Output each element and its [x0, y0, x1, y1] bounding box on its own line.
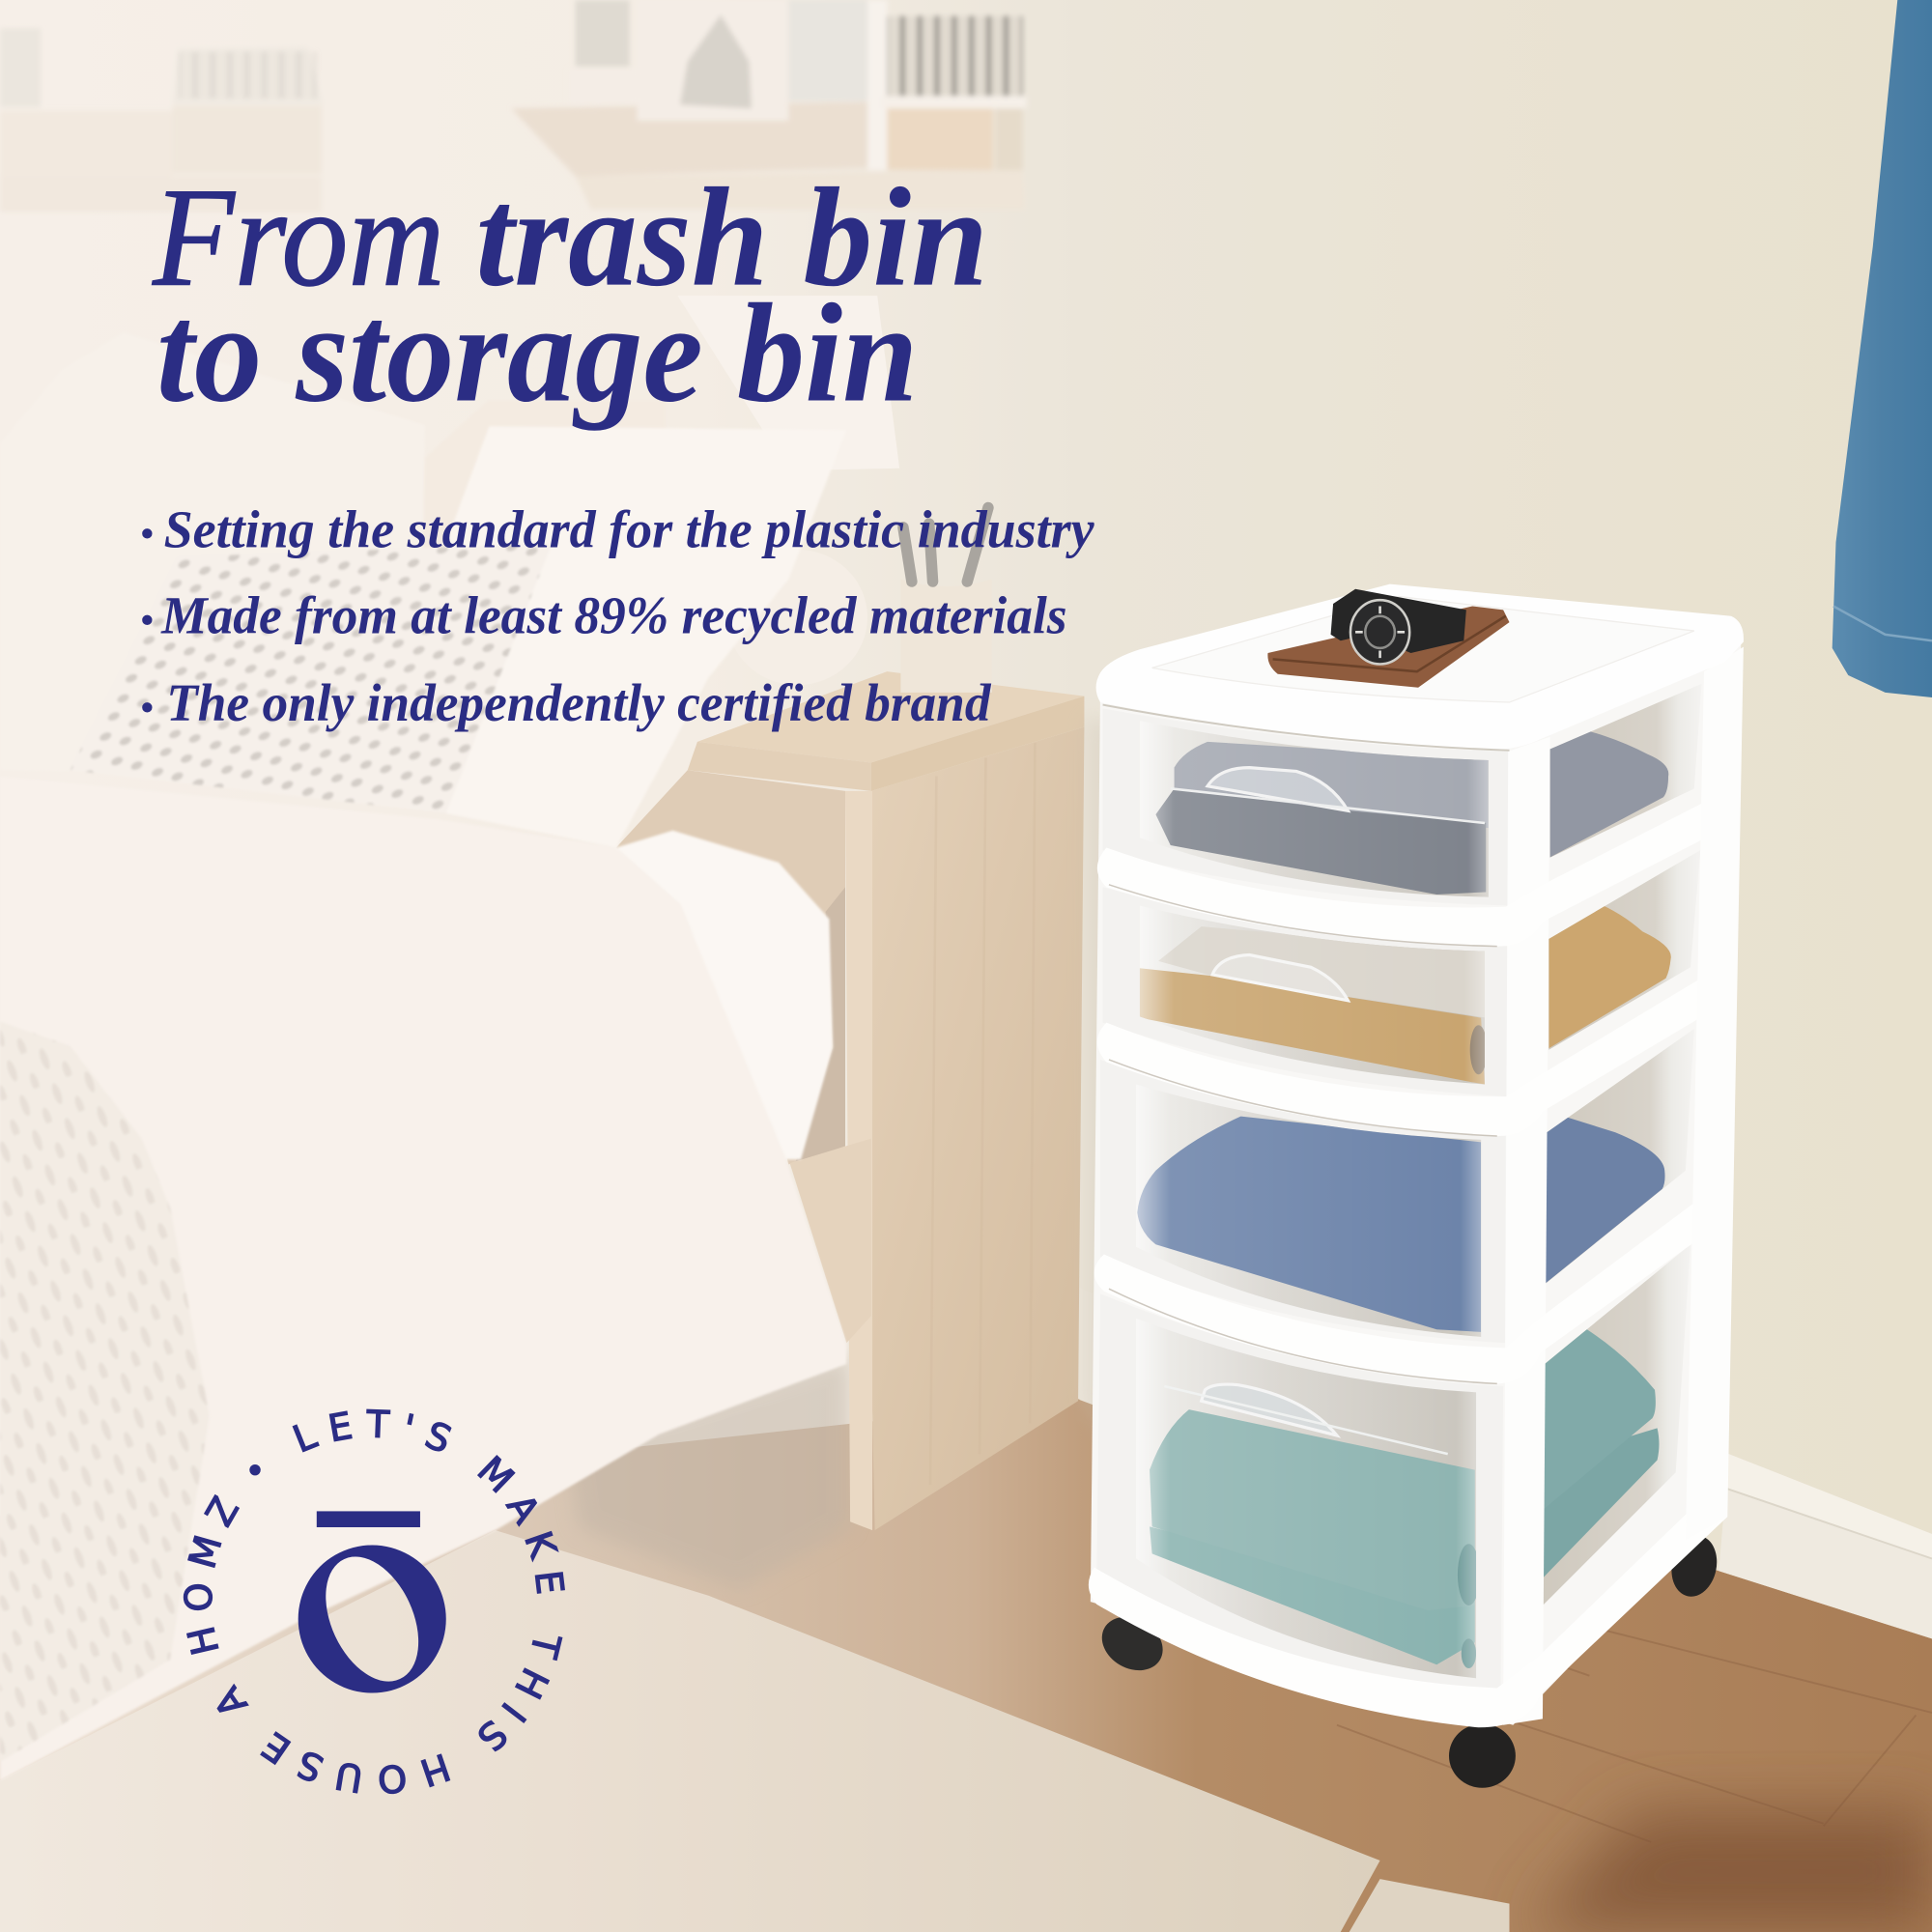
- floor: [0, 1355, 1932, 1932]
- jeans hanging on the wall: [1833, 0, 1932, 697]
- wall shelves: [0, 0, 1026, 212]
- title: trash bin: [475, 158, 988, 316]
- side window 2 with ochre towel: [1548, 856, 1690, 1049]
- bullet: plastic industry standard: Setting the standard for the plastic industry: [164, 499, 1094, 558]
- title: From: [152, 158, 444, 316]
- casters: [1093, 1531, 1722, 1788]
- bullet list: [140, 499, 1094, 732]
- logo bar: [317, 1511, 420, 1527]
- side window 3 with blue towel: [1546, 1036, 1685, 1283]
- wristwatch: [1331, 589, 1466, 665]
- bullet: certified brand: •: [140, 688, 154, 728]
- lamp, vase and pen cup: [678, 296, 992, 693]
- cabinet body: [1091, 640, 1741, 1725]
- rear corner post: [1686, 647, 1744, 1540]
- side window 4 with teal towels: [1544, 1253, 1681, 1605]
- drawer 2 with ochre towel: [1140, 911, 1485, 1084]
- circular logo badge: [184, 1408, 565, 1795]
- bed with pillows: [0, 332, 846, 1780]
- side window 1 with grey towel: [1549, 689, 1692, 858]
- drawer rails: [1089, 795, 1727, 1727]
- throw blanket: [0, 1021, 210, 1762]
- drawer 1 with grey towel: [1155, 725, 1489, 897]
- drawer 3 with blue towel: [1137, 1091, 1482, 1337]
- bullet: certified brand: The only independently certified brand: [166, 673, 992, 732]
- front corner post: [1503, 737, 1550, 1725]
- soft cabinet shadow on wall: [1084, 715, 1171, 1540]
- title: to storage bin: [156, 274, 918, 432]
- storage drawer cabinet: [1089, 584, 1744, 1788]
- bullet: plastic industry standard: •: [140, 514, 154, 554]
- logo circle: [298, 1545, 446, 1693]
- drawer 4 with teal towels: [1150, 1326, 1476, 1679]
- baseboard: [1079, 1288, 1932, 1638]
- title: [152, 158, 988, 432]
- ring text: LET'S MAKE THIS HOUSE A HOMZ: [184, 1408, 565, 1795]
- ring dot: [249, 1464, 261, 1475]
- nightstand: [616, 671, 1084, 1530]
- cabinet top: [1096, 584, 1744, 751]
- bullet: recycled materials: Made from at least 89% recycled materials: [160, 586, 1067, 645]
- bullet: recycled materials: •: [140, 600, 154, 640]
- rug: [0, 1530, 1509, 1932]
- folded brown wallet: [1267, 607, 1509, 688]
